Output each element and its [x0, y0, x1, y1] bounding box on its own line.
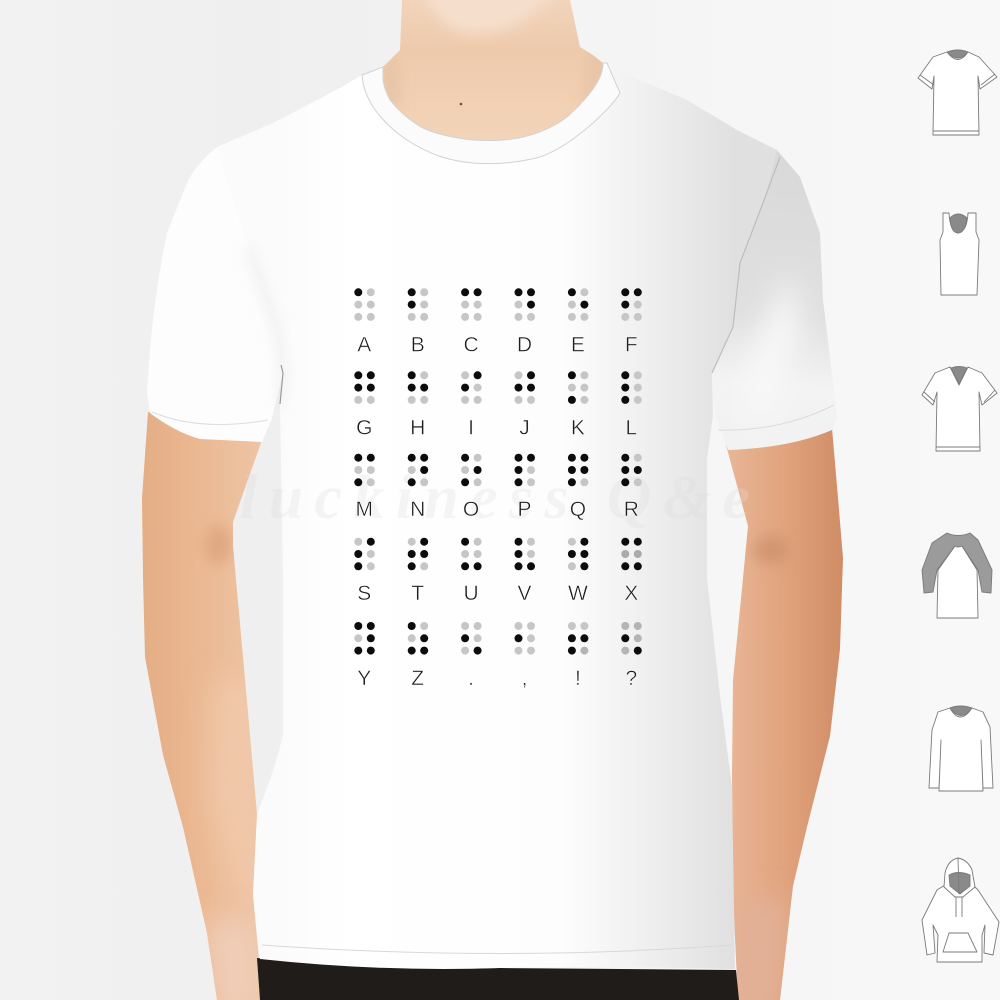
cell exclamation: !: [575, 667, 581, 690]
cell B: [408, 288, 428, 356]
cell D: [514, 288, 535, 356]
t-shirt: [147, 63, 837, 969]
cell E: E: [571, 333, 585, 356]
braille chart: [354, 288, 642, 690]
watermark: luckiness Q&e: [240, 464, 750, 532]
cell K: K: [571, 416, 585, 439]
left sleeve: [147, 147, 283, 442]
cell J: [514, 371, 535, 439]
cell X: X: [624, 582, 638, 605]
cell comma: [514, 622, 535, 690]
cell F: [621, 288, 642, 356]
cell J: J: [519, 416, 530, 439]
cell period: [461, 622, 482, 690]
cell Z: [408, 622, 428, 690]
cell period: .: [468, 667, 474, 690]
left arm: [142, 412, 262, 1000]
cell V: V: [517, 582, 532, 605]
cell comma: ,: [522, 667, 527, 690]
cell C: [461, 288, 482, 356]
cell V: [514, 538, 535, 605]
cell question: [621, 622, 642, 690]
shirt body: [217, 63, 777, 969]
cell T: T: [411, 582, 424, 605]
left underarm crease: [280, 365, 283, 404]
cell L: [621, 371, 642, 439]
cell T: [408, 538, 428, 605]
cell Q: [568, 454, 588, 521]
right sleeve: [712, 150, 837, 450]
cell N: [408, 454, 428, 521]
trousers: [257, 958, 739, 1000]
cell O: O: [463, 498, 479, 521]
cell D: D: [517, 333, 532, 356]
cell H: [408, 371, 428, 439]
left armpit fold: [248, 247, 283, 404]
cell F: F: [625, 333, 638, 356]
icon: hoodie: [922, 858, 999, 962]
cell M: M: [356, 498, 373, 521]
cell E: [568, 288, 588, 356]
right sleeve highlight: [745, 270, 800, 420]
neck and chin: [380, 0, 608, 146]
cell I: [461, 371, 482, 439]
cell U: U: [464, 582, 479, 605]
cell S: S: [357, 582, 371, 605]
cell Z: Z: [411, 667, 424, 690]
cell A: A: [357, 333, 371, 356]
icon: long sleeve tee: [929, 706, 993, 791]
cell Y: [354, 622, 375, 690]
product thumbnails: [918, 50, 999, 962]
cell U: [461, 538, 482, 605]
cell P: [514, 454, 535, 521]
icon: tank top: [940, 213, 979, 295]
cell M: [354, 454, 375, 521]
cell exclamation: [568, 622, 588, 690]
cell Q: Q: [570, 498, 586, 521]
cell B: B: [411, 333, 425, 356]
icon: raglan tee: [922, 533, 992, 618]
cell X: [621, 538, 642, 605]
cell C: C: [464, 333, 479, 356]
cell R: R: [624, 498, 639, 521]
cell S: [354, 538, 375, 605]
cell A: [354, 288, 375, 356]
right sleeve seam: [712, 157, 780, 373]
cell W: W: [568, 582, 588, 605]
cell H: H: [410, 416, 425, 439]
hem stitching: [262, 945, 733, 954]
icon: crew t-shirt: [918, 50, 997, 135]
cell W: [568, 538, 588, 605]
cell Y: Y: [357, 667, 371, 690]
cell G: G: [356, 416, 372, 439]
right arm: [726, 428, 843, 1000]
cell P: P: [517, 498, 532, 521]
cuff stitching: [152, 405, 834, 430]
cell R: [621, 454, 642, 521]
icon: v-neck t-shirt: [922, 366, 997, 451]
cell question: ?: [625, 667, 637, 690]
cell L: L: [625, 416, 637, 439]
cell O: [461, 454, 482, 521]
cell G: [354, 371, 375, 439]
collar: [362, 63, 620, 164]
cell I: I: [468, 416, 474, 439]
cell N: N: [410, 498, 425, 521]
cell K: [568, 371, 588, 439]
